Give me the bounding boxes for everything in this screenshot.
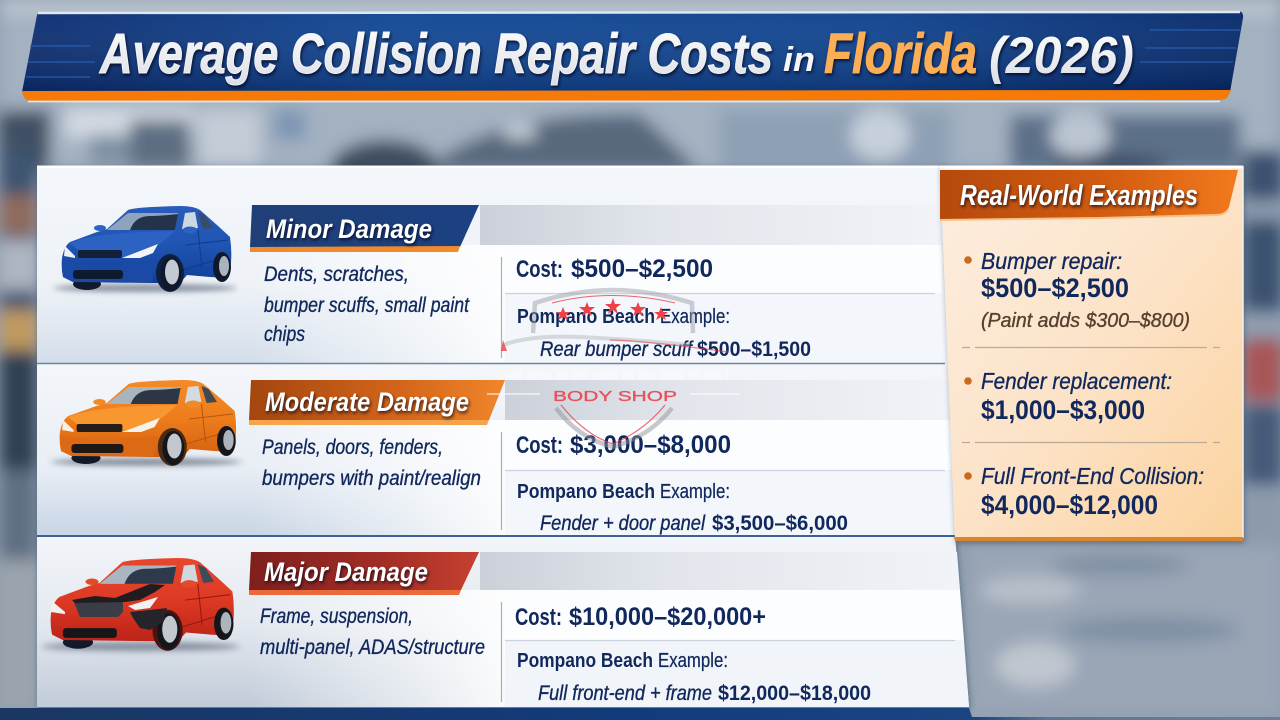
text: minor damage Pompano Beach example: Pompano Beach <box>517 306 655 328</box>
text: moderate damage Pompano Beach example: $3,500–$6,000 <box>712 512 848 535</box>
row: moderate damage <box>37 365 955 536</box>
list item: fender replacement: $1,000–$3,000 <box>981 395 1145 425</box>
panel: real-world examples <box>940 166 1243 541</box>
text: minor damage description: chips <box>264 323 305 346</box>
text: major damage Pompano Beach example <box>517 650 871 705</box>
text: moderate damage description <box>262 436 481 490</box>
text: major damage Pompano Beach example: Example: <box>658 650 728 672</box>
text: minor damage Pompano Beach example <box>517 306 811 361</box>
list item: bumper repair <box>964 248 1190 332</box>
text: major damage cost: Cost: <box>515 604 562 631</box>
title banner <box>22 11 1243 102</box>
text: minor damage description <box>264 263 470 346</box>
text: major damage Pompano Beach example: Pompano Beach <box>517 650 653 672</box>
text: major damage description <box>260 605 485 659</box>
heading: real-world examples <box>940 170 1238 220</box>
text: major damage description: multi-panel, ADAS/structure <box>260 636 485 659</box>
icon: stars <box>556 298 668 320</box>
list item: fender replacement <box>964 368 1172 425</box>
text: minor damage Pompano Beach example: Rear bumper scuff <box>540 338 694 361</box>
logo text: BODY SHOP <box>553 388 677 405</box>
list item: full front-end collision <box>964 463 1204 520</box>
heading: major damage <box>249 552 479 595</box>
text: minor damage Pompano Beach example: $500–$1,500 <box>697 338 811 361</box>
bottom navy strip <box>0 708 1280 720</box>
text: moderate damage cost: Cost: <box>516 432 563 459</box>
text: minor damage cost: $500–$2,500 <box>571 255 713 283</box>
text: minor damage description: Dents, scratches, <box>264 263 409 286</box>
row: minor damage <box>37 168 945 364</box>
icon: orange car <box>51 380 242 466</box>
text: moderate damage Pompano Beach example: Example: <box>660 481 730 503</box>
text: minor damage cost: Cost: <box>516 256 563 283</box>
text: moderate damage Pompano Beach example <box>517 481 848 535</box>
text: minor damage description: bumper scuffs, small paint <box>264 294 470 317</box>
text: moderate damage description: bumpers with paint/realign <box>262 467 481 490</box>
list item: full front-end collision: Full Front-End Collision: <box>981 463 1204 489</box>
list item: bumper repair: Bumper repair: <box>981 248 1122 274</box>
icon: damaged red car <box>41 558 240 651</box>
row: major damage <box>37 537 969 707</box>
heading: minor damage <box>250 205 479 252</box>
text: major damage description: Frame, suspension, <box>260 605 413 628</box>
list item: bumper repair: (Paint adds $300–$800) <box>981 310 1190 332</box>
text: major damage Pompano Beach example: Full front-end + frame <box>538 682 712 705</box>
main cost panel <box>37 166 969 707</box>
text: minor damage Pompano Beach example: Example: <box>660 306 730 328</box>
watermark logo: body shop shield <box>487 290 740 447</box>
list item: fender replacement: Fender replacement: <box>981 368 1172 394</box>
text: moderate damage description: Panels, doors, fenders, <box>262 436 443 459</box>
title text: (2026) <box>989 27 1134 85</box>
heading: major damage: Major Damage <box>264 557 428 587</box>
text: moderate damage cost: $3,000–$8,000 <box>570 431 731 459</box>
heading: moderate damage <box>249 380 505 425</box>
title text: Average Collision Repair Costs <box>98 22 773 86</box>
heading: moderate damage: Moderate Damage <box>265 387 469 417</box>
text: moderate damage Pompano Beach example: Pompano Beach <box>517 481 655 503</box>
text: major damage cost: $10,000–$20,000+ <box>569 603 766 631</box>
icon: blue car <box>53 206 237 292</box>
title text: Florida <box>824 22 977 86</box>
list item: bumper repair: $500–$2,500 <box>981 273 1129 303</box>
heading: minor damage: Minor Damage <box>266 214 432 244</box>
heading: real-world examples: Real-World Examples <box>960 180 1198 212</box>
title text: in <box>783 41 815 79</box>
text: major damage Pompano Beach example: $12,000–$18,000 <box>718 682 871 705</box>
text: moderate damage Pompano Beach example: Fender + door panel <box>540 512 706 535</box>
list item: full front-end collision: $4,000–$12,000 <box>981 490 1158 520</box>
